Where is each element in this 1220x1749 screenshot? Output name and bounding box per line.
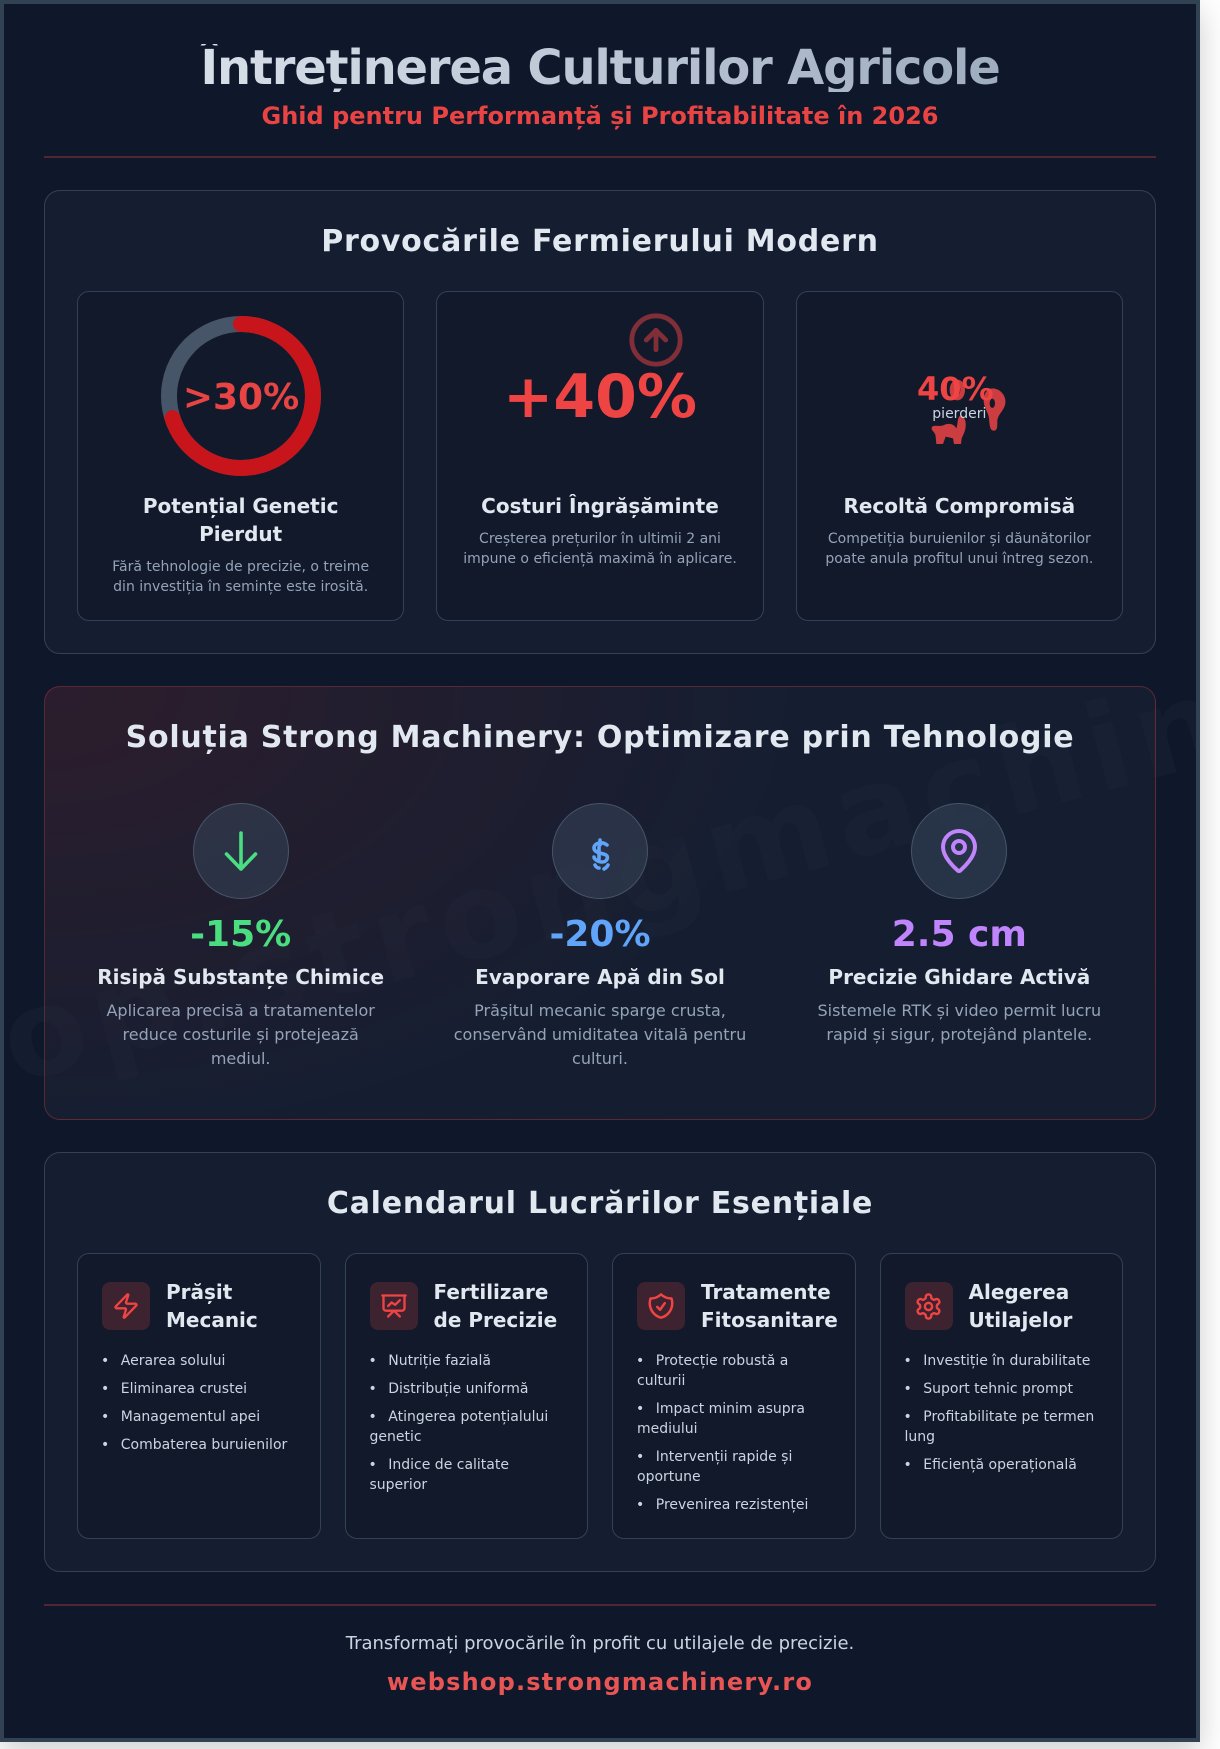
stat: 40% losses with pest shapes: 40% [917,370,994,408]
card: fertilization [344,1253,588,1539]
title: Întreținerea Culturilor Agricole [200,40,1000,96]
panel: calendar [44,1152,1156,1572]
item heading: Precizie Ghidare Activă [828,965,1090,989]
list [904,1353,1094,1473]
list: • Aerarea solului [101,1353,225,1369]
card: machinery [880,1253,1123,1539]
card: treatments [612,1253,856,1539]
list: • Nutriție fazială [368,1353,491,1369]
card header [370,1280,557,1332]
footer text: Transformați provocările în profit cu utilajele de precizie. [346,1633,854,1654]
list: • Distribuție uniformă [368,1381,528,1397]
stat: +40% with arrow icon [503,313,697,432]
card header: Tratamente Fitosanitare [701,1280,838,1332]
card header: Fertilizare de Precizie [434,1280,557,1332]
heading: challenges: Provocările Fermierului Modern [321,224,879,259]
card: fertilizer cost [436,291,764,621]
list: • Eficiență operațională [904,1457,1077,1473]
card header [905,1280,1072,1332]
stat: -20% [549,914,651,955]
list: • Combaterea buruienilor [101,1437,287,1453]
item heading: Risipă Substanțe Chimice [97,965,384,989]
stat: +40% with arrow icon: +40% [503,362,697,432]
item text: Prășitul mecanic sparge crusta, conservând umiditatea vitală pentru culturi. [454,1001,746,1068]
card header [102,1280,258,1332]
footer [44,1604,1156,1698]
list: • Eliminarea crustei [101,1381,247,1397]
list: • Managementul apei [101,1409,260,1425]
list: • Atingerea potențialului genetic [368,1409,548,1445]
list: • Suport tehnic prompt [904,1381,1073,1397]
list [368,1353,548,1493]
footer link: webshop.strongmachinery.ro [387,1668,813,1696]
stat: 2.5 cm [892,914,1027,955]
item: water [454,803,746,1068]
stat: -15% [190,914,291,955]
list: • Impact minim asupra mediului [636,1401,805,1437]
item text: Aplicarea precisă a tratamentelor reduce costurile și protejează mediul. [106,1001,375,1068]
list [101,1353,288,1453]
donut chart: 30%: >30% [182,377,299,418]
item text: Sistemele RTK și video permit lucru rapid și sigur, protejând plantele. [818,1001,1101,1044]
list: • Profitabilitate pe termen lung [904,1409,1094,1445]
card: compromised harvest [796,291,1123,621]
subtitle: Ghid pentru Performanță și Profitabilitate în 2026 [262,102,938,130]
card heading: Recoltă Compromisă [843,494,1075,518]
list: • Protecție robustă a culturii [636,1353,788,1389]
card text: Competiția buruienilor și dăunătorilor poate anula profitul unui întreg sezon. [825,531,1093,567]
panel: solution [44,686,1156,1120]
card header: Alegerea Utilajelor [968,1280,1072,1332]
heading: solution: Soluția Strong Machinery: Optimizare prin Tehnologie [126,720,1074,755]
heading: calendar: Calendarul Lucrărilor Esențiale [327,1186,873,1221]
icon: arrow down [193,803,289,899]
card heading: Costuri Îngrășăminte [481,494,719,518]
solution items [97,803,1101,1068]
card: hoeing [77,1253,320,1539]
icon: presentation chart [370,1282,418,1330]
card header [637,1280,838,1332]
icon: lightning [102,1282,150,1330]
list: • Investiție în durabilitate [904,1353,1090,1369]
list: • Intervenții rapide și oportune [636,1449,792,1485]
icon: dollar [552,803,648,899]
calendar cards [77,1253,1123,1539]
card heading: Potențial Genetic Pierdut [143,494,338,546]
item heading: Evaporare Apă din Sol [475,965,725,989]
item: guidance [818,803,1101,1044]
card text: Creșterea prețurilor în ultimii 2 ani impune o eficiență maximă în aplicare. [463,531,737,567]
title [44,44,1156,92]
list: • Indice de calitate superior [368,1457,509,1493]
stat: 40% losses with pest shapes [917,370,1006,444]
list: • Prevenirea rezistenței [636,1497,808,1513]
panel: challenges [44,190,1156,654]
icon: shield check [637,1282,685,1330]
icon: gear [904,1282,952,1330]
card: genetic potential [77,291,404,621]
stat: 40% losses with pest shapes: pierderi [932,406,986,422]
card header: Prășit Mecanic [166,1280,258,1332]
donut chart: 30% [161,316,321,476]
challenge cards [77,291,1123,621]
item: chemicals [97,803,384,1068]
icon: map pin [911,803,1007,899]
list [636,1353,808,1513]
header [44,44,1156,158]
card text: Fără tehnologie de precizie, o treime din investiția în semințe este irosită. [112,559,369,595]
